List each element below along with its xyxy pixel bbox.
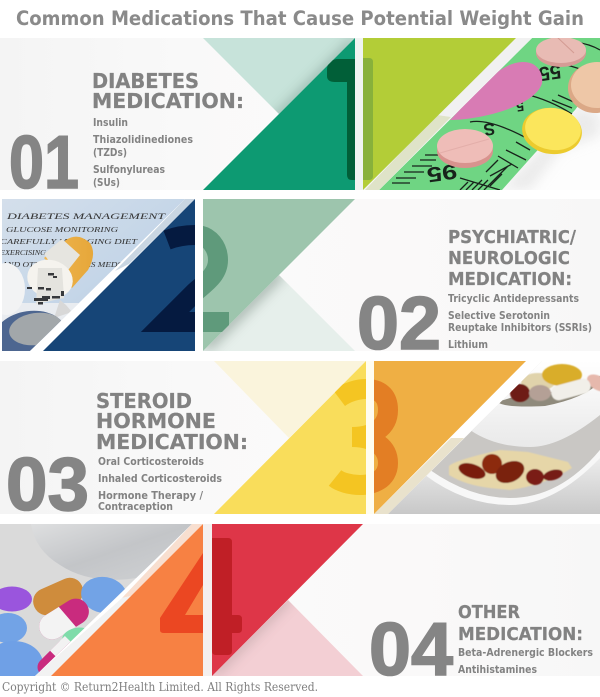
spoon pills — [510, 364, 600, 402]
pill: purple — [0, 586, 32, 612]
document text — [0, 211, 167, 269]
scale numerals: 55 — [537, 60, 562, 84]
document text: AND OTHER DIABETES MEDS — [1, 260, 122, 269]
white bowl — [31, 524, 192, 580]
number 01: 01 — [9, 120, 79, 204]
triangle shadow — [214, 597, 288, 672]
panel: diabetes management photo — [2, 199, 195, 351]
pill: pink top — [536, 51, 586, 67]
heading: psychiatric: PSYCHIATRIC/ — [448, 227, 576, 248]
lower bowl — [396, 450, 600, 508]
medication list: diabetes: (TZDs) — [93, 146, 127, 159]
pale yellow triangle — [214, 361, 366, 438]
upper bowl — [472, 361, 600, 447]
medication list: psychiatric: Lithium — [448, 338, 488, 351]
heading: psychiatric: NEUROLOGIC — [448, 248, 570, 269]
panel: supplements in white bowls — [366, 361, 600, 514]
triangle shadow — [205, 272, 280, 347]
red triangle — [212, 524, 363, 676]
strip — [451, 361, 542, 438]
glucose meter — [2, 310, 61, 351]
pill: pink lower — [437, 148, 493, 168]
large numeral 2 left part — [165, 235, 229, 322]
medication list: diabetes: (SUs) — [93, 176, 120, 189]
panel: pills on measuring tape — [363, 37, 600, 190]
document text: EXERCISING — [0, 248, 47, 257]
large numeral 4 left part — [160, 553, 203, 633]
medication list: steroid: Hormone Therapy / — [98, 489, 204, 502]
heading: other: OTHER — [458, 602, 520, 623]
medication list: diabetes: Sulfonylureas — [93, 163, 165, 176]
pill: yellow — [522, 108, 582, 154]
pill: blue lower — [0, 641, 43, 687]
medication list: steroid — [98, 455, 222, 513]
panel: colourful pills photo — [0, 524, 203, 687]
yellow triangle — [214, 361, 366, 514]
panel: psychiatric and neurologic medication — [203, 199, 592, 351]
heading: diabetes: DIABETES — [92, 69, 199, 93]
pale triangle — [203, 275, 355, 351]
heading: steroid — [96, 389, 248, 454]
medication list: other: Antihistamines — [458, 663, 537, 676]
scale numerals: 95 — [425, 159, 458, 186]
bowl contents — [449, 450, 572, 490]
orange triangle — [51, 524, 203, 676]
large numeral 1 left part — [327, 59, 355, 180]
medication list: psychiatric — [448, 292, 592, 351]
strip — [122, 524, 203, 598]
scale numerals: S — [482, 119, 496, 139]
number 02: 02 — [357, 281, 441, 365]
white lid — [0, 263, 25, 315]
heading: psychiatric — [448, 227, 576, 290]
medication list: steroid: Oral Corticosteroids — [98, 455, 204, 468]
photo — [374, 361, 600, 514]
medication list: psychiatric: Selective Serotonin — [448, 309, 550, 322]
capsule: orange — [33, 578, 82, 616]
scale numerals: 5 — [515, 98, 525, 115]
medication list: psychiatric: Tricyclic Antidepressants — [448, 292, 579, 305]
spoon — [497, 376, 600, 406]
heading: steroid: STEROID — [96, 389, 192, 413]
blue triangle — [43, 199, 195, 351]
sage triangle — [203, 199, 355, 351]
large numeral 3 left part — [328, 379, 366, 495]
triangle shadow — [275, 42, 355, 122]
heading: other — [458, 602, 583, 645]
pill: blue upper — [81, 576, 125, 613]
bottle label — [44, 239, 80, 270]
pale green triangle — [203, 38, 355, 114]
capsule: white and magenta — [34, 636, 78, 680]
medication list: other — [458, 646, 593, 676]
medication list: diabetes: Thiazolidinediones — [93, 133, 193, 146]
large numeral 4 right part — [212, 538, 242, 655]
panel: steroid hormone medication — [0, 361, 366, 514]
lime triangle — [363, 38, 516, 190]
pill: magenta — [450, 62, 542, 120]
medication list: steroid: Contraception — [98, 500, 173, 513]
large numeral 1 right part — [363, 58, 373, 180]
heading: psychiatric: MEDICATION: — [448, 269, 572, 290]
pink triangle — [212, 600, 363, 676]
medication list: diabetes — [93, 116, 193, 189]
document text: GLUCOSE MONITORING — [6, 225, 119, 234]
medication list: diabetes: Insulin — [93, 116, 128, 129]
orange triangle — [374, 361, 526, 514]
pill: tan — [568, 63, 600, 113]
orange bottle — [44, 237, 93, 288]
large numeral 2 right part — [203, 226, 229, 332]
medication list: steroid: Inhaled Corticosteroids — [98, 472, 222, 485]
number 03: 03 — [6, 442, 89, 526]
photo — [363, 37, 600, 190]
panel: diabetes medication — [0, 38, 363, 204]
strip — [115, 199, 195, 271]
black pills — [27, 273, 64, 304]
heading: steroid: HORMONE — [96, 409, 216, 433]
strip — [437, 38, 532, 117]
large numeral 3 right part — [374, 380, 398, 493]
heading: other: MEDICATION: — [458, 624, 583, 645]
capsule: magenta and white — [39, 598, 89, 640]
heading: steroid: MEDICATION: — [96, 430, 248, 454]
document text: CAREFULLY MANAGING DIET — [0, 237, 138, 246]
green triangle — [203, 38, 355, 190]
heading: diabetes — [92, 69, 244, 113]
document text: DIABETES MANAGEMENT — [5, 211, 167, 221]
pill: green — [60, 625, 92, 647]
pill: blue middle — [0, 613, 27, 643]
heading: diabetes: MEDICATION: — [92, 89, 244, 113]
scale numerals — [428, 66, 560, 182]
panel: other medication — [203, 524, 600, 691]
copyright: Copyright © Return2Health Limited. All Rights Reserved. — [2, 680, 318, 694]
number 04: 04 — [369, 607, 453, 691]
bottle opening — [27, 260, 73, 295]
